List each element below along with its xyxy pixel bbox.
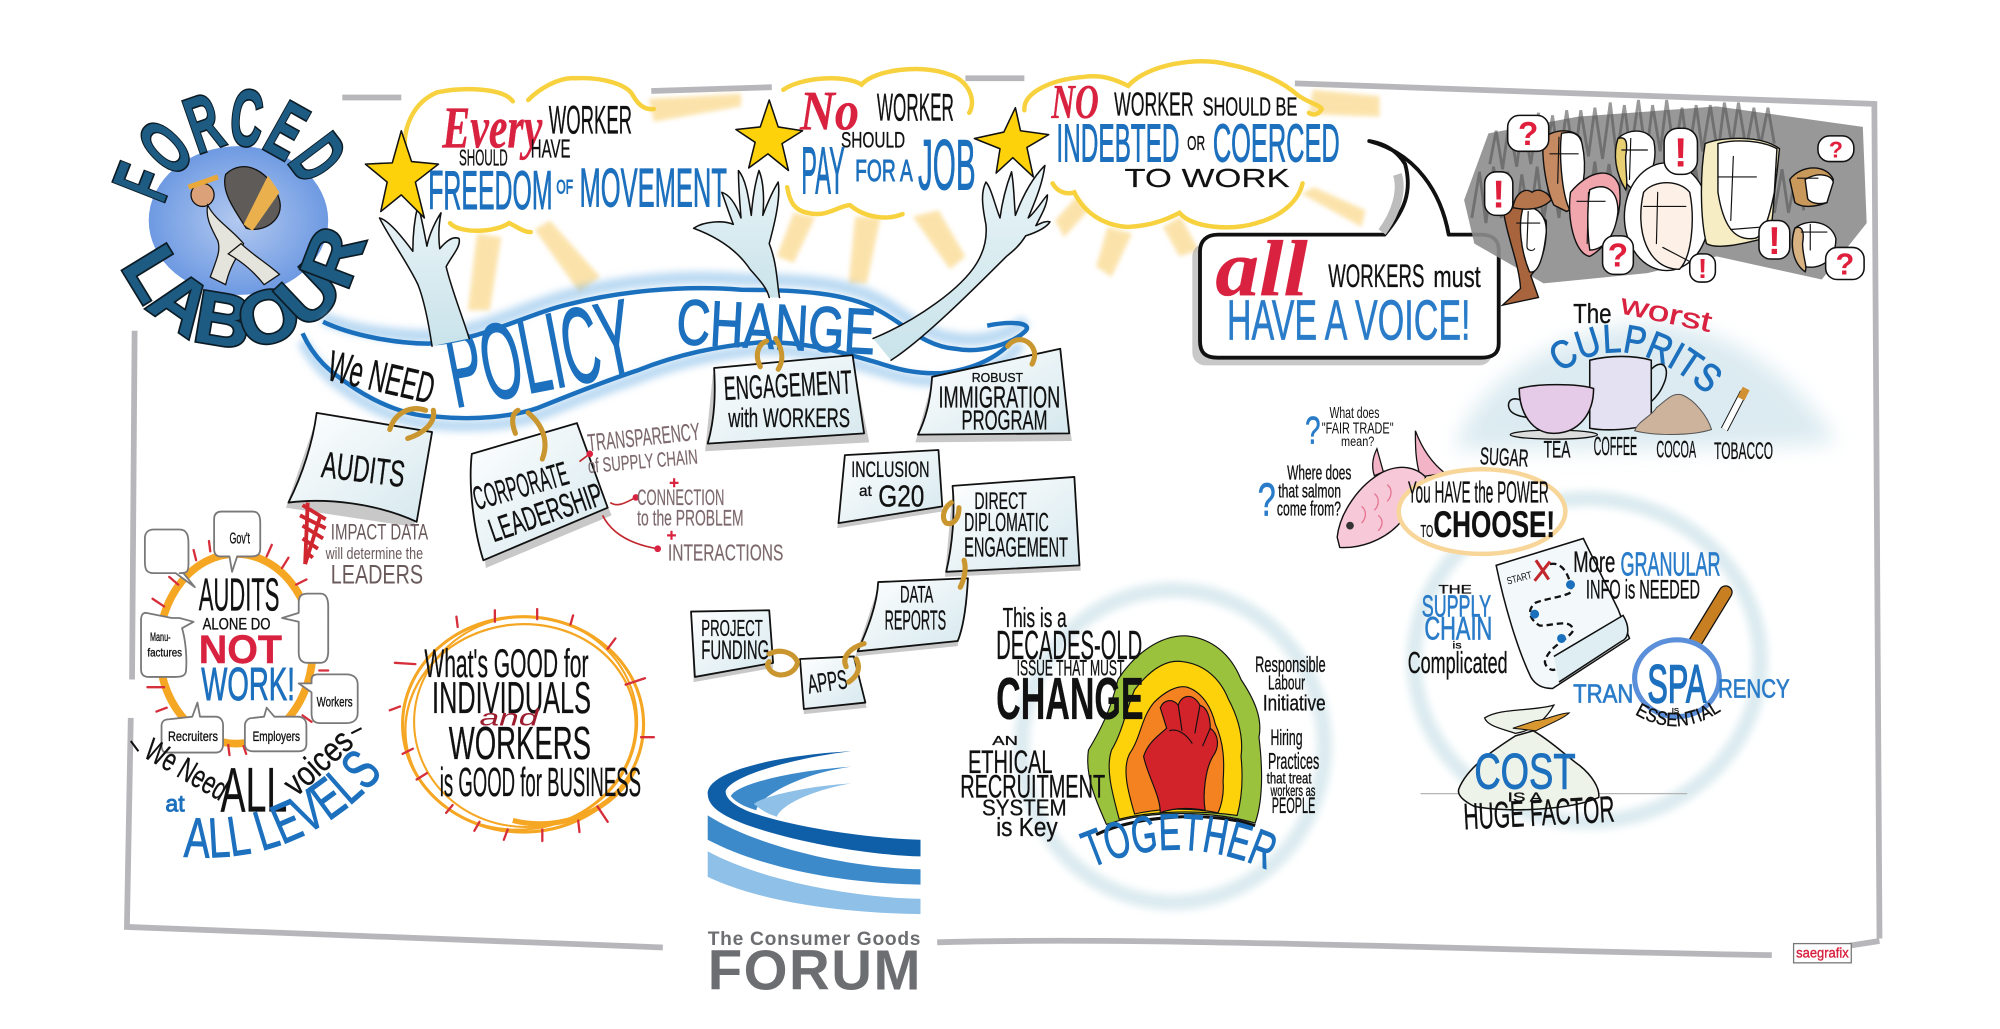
ethical recruitment text: SYSTEM	[982, 794, 1067, 820]
amber rings	[392, 609, 649, 845]
speech bubble: all workers must have a voice: HAVE A VOICE!	[1227, 289, 1471, 352]
logo swoosh	[708, 751, 921, 914]
speech marks	[1485, 115, 1864, 284]
panel: what's good for individuals	[390, 609, 654, 845]
tag: inclusion at G20: G20	[878, 478, 924, 513]
ring	[513, 410, 545, 459]
leadership notes: to the PROBLEM	[637, 506, 744, 531]
choose text	[1408, 475, 1555, 545]
impact data note: will determine the	[325, 544, 423, 563]
banner text	[323, 277, 877, 430]
title word: FORCED: FORCED	[111, 88, 344, 204]
supply chain text: THE	[1438, 585, 1472, 597]
impact data note: IMPACT DATA	[331, 520, 429, 545]
cloud message: no worker indebted: SHOULD BE	[1203, 93, 1297, 121]
speech marks: ?	[1835, 246, 1854, 281]
questions: that salmon	[1278, 481, 1341, 502]
circle message: WORKERS	[449, 717, 591, 769]
banner: we need policy change	[303, 277, 1027, 430]
questions: What does	[1329, 405, 1380, 422]
questions: come from?	[1277, 497, 1341, 520]
tag: data reports: DATA	[900, 582, 934, 609]
banner text: CHANGE	[675, 286, 877, 368]
speech bubble: all workers must have a voice: WORKERS	[1328, 258, 1424, 294]
speech marks: !	[1492, 174, 1505, 217]
circle message: and	[479, 705, 540, 731]
stakeholder bubbles: Gov't	[229, 531, 250, 548]
stakeholder bubbles: Employers	[253, 728, 300, 744]
cloud message: every worker	[428, 94, 727, 221]
commodity labels: TEA	[1544, 437, 1571, 464]
transparency text: IS	[1672, 706, 1679, 715]
leadership notes: +	[667, 526, 677, 545]
worker faces	[1517, 137, 1827, 263]
cost sack: COST	[1474, 743, 1576, 799]
speech marks: !	[1768, 220, 1781, 263]
choose text: CHOOSE!	[1433, 503, 1555, 545]
cost sack	[1421, 705, 1687, 837]
cloud message: no worker indebted: NO	[1051, 75, 1099, 129]
tag: corporate leadership	[469, 410, 612, 568]
crowd of workers	[1464, 100, 1867, 305]
commodity labels: COCOA	[1656, 437, 1696, 464]
supply chain text: Complicated	[1408, 645, 1508, 680]
questions: ?	[1305, 410, 1321, 453]
circle message: What's GOOD for	[424, 642, 588, 686]
side notes: workers as	[1270, 783, 1316, 800]
cost sack: HUGE FACTOR	[1462, 788, 1616, 837]
circle message	[424, 642, 641, 805]
tag: inclusion at G20	[837, 450, 942, 528]
speech marks: ?	[1829, 137, 1843, 163]
questions	[1258, 405, 1394, 525]
stakeholder bubbles: factures	[147, 647, 182, 659]
red ticks	[390, 609, 654, 841]
leadership notes: +	[669, 473, 679, 492]
leadership notes: INTERACTIONS	[668, 539, 783, 565]
tag: apps: APPS	[806, 664, 849, 700]
transparency text: RENCY	[1718, 675, 1790, 703]
side notes	[1255, 652, 1326, 818]
decades-old text: This is a	[1003, 601, 1067, 633]
cloud message: no worker indebted: WORKER	[1114, 86, 1194, 123]
text: COERCED	[1213, 114, 1340, 174]
cloud message: no worker indebted: OR	[1187, 132, 1205, 155]
chain of tags	[691, 450, 1081, 714]
we need all voices: ALL LEVELS	[183, 751, 380, 858]
panel: supply chain	[1404, 488, 1790, 837]
icon: coffee mug	[1590, 356, 1666, 430]
tag: project funding	[691, 610, 773, 682]
tag: direct diplomatic engagement: DIRECT	[974, 488, 1027, 515]
circle message: INDIVIDUALS	[432, 672, 591, 723]
transparency text	[1573, 655, 1790, 726]
tag: audits: AUDITS	[320, 443, 407, 495]
icon: map scroll: START	[1506, 570, 1534, 588]
speech bubble: all workers must have a voice: must	[1433, 259, 1481, 294]
panel: the worst culprits	[1454, 287, 1835, 473]
central message: NOT	[199, 628, 282, 672]
raised arms	[379, 165, 1050, 360]
tag: robust immigration program: PROGRAM	[962, 404, 1047, 436]
icon: fish	[1337, 431, 1445, 548]
ring	[390, 409, 434, 438]
red ticks	[147, 541, 328, 755]
central message: ALONE DO	[203, 615, 271, 633]
fist with halo layers	[1088, 636, 1262, 824]
questions: mean?	[1341, 433, 1374, 449]
tag: robust immigration program	[915, 340, 1072, 442]
side notes: PEOPLE	[1272, 793, 1315, 818]
ethical recruitment text: ETHICAL	[968, 744, 1053, 780]
side notes: Labour	[1268, 672, 1305, 695]
commodity labels: SUGAR	[1479, 443, 1529, 473]
speech marks: !	[1674, 130, 1688, 176]
cloud message: no worker should pay: SHOULD	[841, 127, 905, 152]
speech marks: ?	[1608, 238, 1628, 275]
cloud message: every worker: OF	[556, 178, 573, 199]
text: is GOOD for BUSINESS	[440, 759, 641, 805]
banner text: POLICY	[437, 277, 643, 430]
cloud message: no worker should pay	[799, 81, 976, 209]
supply chain text	[1408, 585, 1508, 680]
cloud message: every worker: FREEDOM	[428, 159, 553, 221]
leadership notes: CONNECTION	[637, 485, 724, 510]
questions: Where does	[1287, 462, 1351, 485]
decades-old text: CHANGE	[996, 667, 1144, 732]
text: You HAVE the POWER	[1408, 475, 1549, 510]
stakeholder bubbles: Manu-	[150, 632, 171, 644]
cloud message: no worker should pay: WORKER	[877, 87, 954, 130]
transparency text: ESSENTIAL	[1636, 702, 1722, 726]
central message: WORK!	[201, 658, 295, 710]
tag: direct diplomatic engagement: ENGAGEMENT	[964, 530, 1068, 562]
panel: you have the power to choose	[1258, 405, 1565, 554]
impact data note: LEADERS	[331, 559, 423, 589]
tag: corporate leadership: CORPORATE	[469, 456, 573, 518]
artist signature: saegrafix	[1796, 945, 1849, 961]
icon: tea cup	[1508, 385, 1597, 439]
decades-old text	[996, 601, 1144, 732]
commodity labels	[1479, 433, 1773, 473]
cloud message: no worker should pay: No	[799, 81, 859, 143]
ethical recruitment text: AN	[992, 733, 1018, 748]
culprits heading: CULPRITS	[1550, 324, 1722, 392]
ethical recruitment text: is Key	[996, 814, 1058, 842]
leadership notes: TRANSPARENCY	[586, 419, 701, 457]
speech marks: ?	[1518, 116, 1538, 153]
ethical recruitment text	[960, 733, 1105, 842]
we need all voices: ALL	[221, 756, 287, 826]
cloud message: no worker should pay: FOR A	[855, 153, 913, 188]
chain rings	[768, 503, 965, 682]
we need all voices: at	[165, 791, 185, 817]
icon: magnifying glass	[1635, 592, 1726, 717]
granular info text: GRANULAR	[1621, 547, 1721, 584]
pale ring	[1022, 590, 1324, 903]
cloud message: no worker indebted	[1051, 75, 1340, 193]
tag: data reports	[855, 578, 968, 656]
panel: audits alone do not work	[130, 510, 380, 858]
culprits heading	[1550, 287, 1722, 392]
icon: map scroll	[1496, 538, 1629, 688]
ring	[757, 338, 782, 369]
stakeholder bubbles: Workers	[317, 693, 353, 709]
speech bubble: all workers must have a voice: all	[1215, 225, 1308, 313]
we need all voices: We Need	[139, 731, 235, 807]
commodity labels: COFFEE	[1594, 433, 1637, 461]
panel: together raised fist: DECADES-OLD	[996, 622, 1142, 668]
speech marks: !	[1698, 252, 1707, 284]
culprits heading: worst	[1617, 287, 1715, 338]
worker heads	[1503, 131, 1836, 305]
cost sack: IS A	[1508, 789, 1543, 804]
panel: together raised fist	[960, 580, 1334, 913]
side notes: that treat	[1267, 770, 1312, 787]
text: JOB	[918, 126, 976, 206]
leadership notes	[579, 419, 783, 565]
title word: LABOUR: LABOUR	[120, 228, 369, 348]
cloud message: every worker: Every	[442, 94, 543, 160]
tag: project funding: PROJECT	[701, 615, 763, 641]
supply chain text: is	[1453, 641, 1462, 652]
decades-old text: ISSUE THAT MUST	[1017, 656, 1124, 681]
speech bubble: all workers must have a voice	[1192, 141, 1499, 365]
title: forced labour	[111, 88, 369, 348]
impact data note	[300, 503, 429, 589]
tag: corporate leadership: LEADERSHIP	[484, 477, 608, 550]
transparency text: TRAN	[1573, 681, 1633, 709]
central message	[199, 568, 295, 710]
icon: blue disc with worker carrying boulder	[149, 146, 328, 295]
tag: audits	[286, 409, 434, 527]
pale ring	[1414, 499, 1760, 822]
leadership notes: of SUPPLY CHAIN	[587, 446, 699, 478]
cloud message: every worker: HAVE	[531, 136, 571, 164]
stars	[365, 100, 1049, 218]
we need all voices: voices	[276, 722, 361, 803]
logo wordmark: The Consumer Goods	[708, 929, 921, 950]
cloud message: no worker indebted: TO WORK	[1124, 165, 1290, 193]
tag: project funding: FUNDING	[701, 635, 769, 665]
tag: data reports: REPORTS	[885, 603, 946, 635]
choose text: TO	[1421, 521, 1433, 541]
tag: inclusion at G20: INCLUSION	[851, 457, 929, 482]
text: MOVEMENT	[579, 156, 727, 218]
granular info text: INFO is NEEDED	[1586, 575, 1700, 605]
panel: together raised fist: TOGETHER	[1078, 814, 1276, 870]
logo: the consumer goods forum	[708, 751, 921, 1002]
granular info text	[1573, 546, 1721, 605]
supply chain text: CHAIN	[1424, 611, 1492, 647]
we need all voices	[130, 722, 380, 858]
tag: engagement with workers: ENGAGEMENT	[723, 364, 853, 408]
side notes: Hiring	[1271, 725, 1303, 750]
tag: engagement with workers	[705, 338, 869, 451]
side notes: Initiative	[1263, 690, 1326, 715]
icon: cigarette	[1724, 388, 1746, 430]
sun rays	[468, 90, 1379, 310]
cloud message: no worker indebted: INDEBTED	[1056, 114, 1179, 174]
tag: inclusion at G20: at	[859, 483, 873, 500]
choose halo	[1399, 469, 1565, 554]
cloud message: every worker: WORKER	[549, 98, 632, 142]
logo: the consumer goods forum: FORUM	[708, 939, 921, 1002]
side notes: Practices	[1268, 748, 1319, 774]
questions: "FAIR TRADE"	[1322, 420, 1394, 437]
stakeholder bubbles	[141, 512, 358, 753]
tag: robust immigration program: IMMIGRATION	[938, 380, 1060, 415]
cloud message: no worker should pay: PAY	[801, 135, 845, 209]
questions: ?	[1258, 473, 1276, 525]
together label	[1091, 850, 1272, 872]
arc over together	[1096, 817, 1255, 835]
amber ring	[159, 554, 313, 744]
panel: the worst culprits: TOBACCO	[1714, 438, 1773, 465]
central message: AUDITS	[199, 568, 279, 620]
ethical recruitment text: RECRUITMENT	[960, 768, 1105, 804]
tag: direct diplomatic engagement	[945, 477, 1081, 577]
side notes: Responsible	[1255, 652, 1326, 677]
supply chain text: SUPPLY	[1422, 589, 1491, 624]
tag: robust immigration program: ROBUST	[972, 370, 1023, 385]
ring	[1008, 340, 1035, 364]
granular info text: More	[1573, 546, 1615, 579]
transparency text: SPA	[1647, 655, 1706, 715]
cloud message: every worker: SHOULD	[459, 144, 508, 170]
tag: apps	[800, 656, 867, 714]
culprits heading: The	[1573, 297, 1612, 329]
icon: cocoa pile	[1635, 394, 1712, 434]
tag: direct diplomatic engagement: DIPLOMATIC	[964, 509, 1049, 537]
stakeholder bubbles: Recruiters	[168, 728, 218, 744]
tag: engagement with workers: with WORKERS	[728, 403, 850, 433]
banner text: We NEED	[323, 342, 439, 413]
clouds	[405, 61, 1322, 232]
